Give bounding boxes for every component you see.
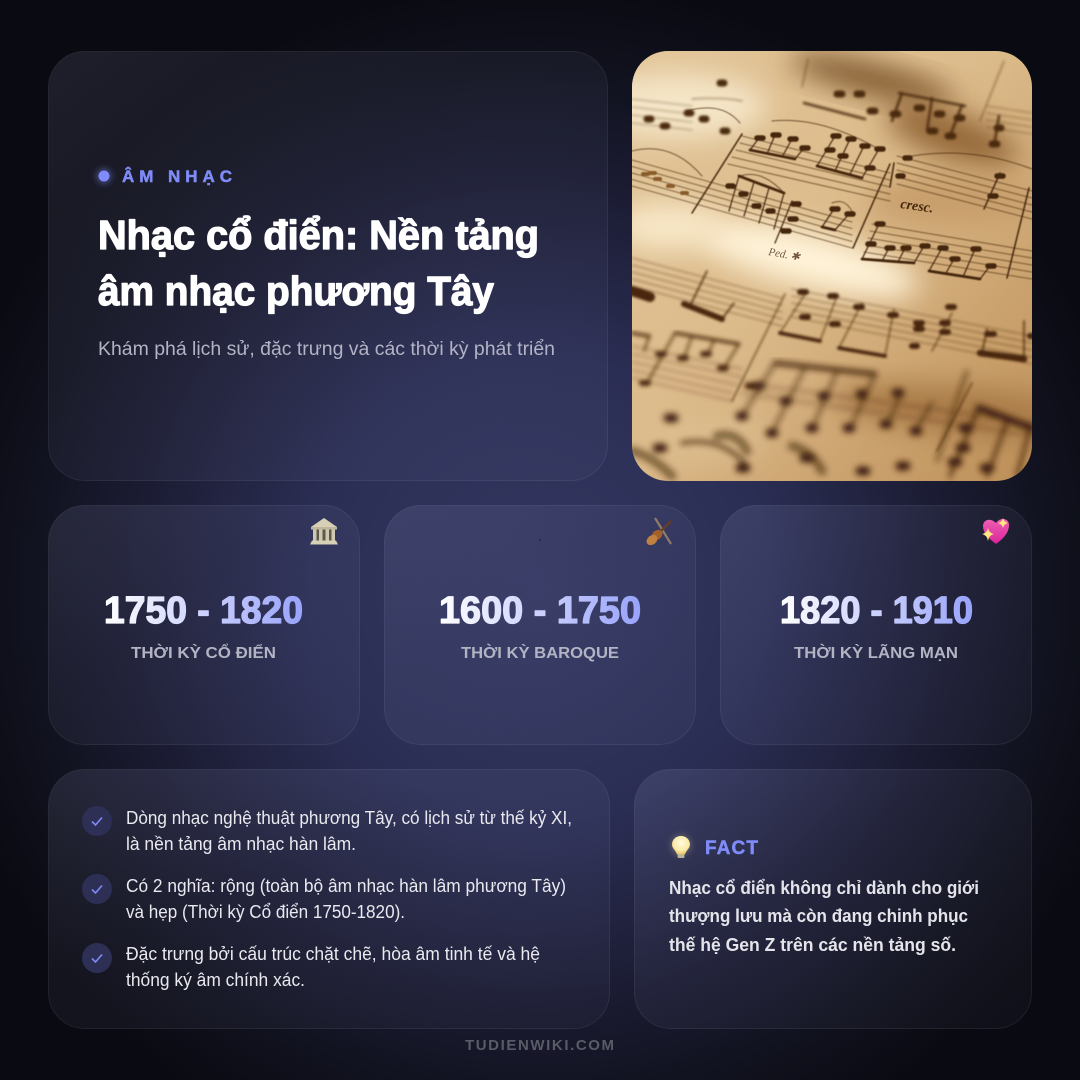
point 1: là nền tảng âm nhạc hàn lâm. [126, 834, 356, 854]
image: sheet music photo [632, 51, 1032, 481]
subtitle: Khám phá lịch sử, đặc trưng và các thời kỳ phát triển [98, 339, 555, 360]
icon: classical building [310, 518, 338, 544]
panel: key points [48, 770, 610, 1028]
fact text: thượng lưu mà còn đang chinh phục [669, 906, 968, 926]
point 2 [82, 874, 566, 922]
sheet: blurred top staves [632, 59, 1032, 146]
sheet: printed marks: cresc. [899, 197, 934, 217]
eyebrow: Âm nhạc: ÂM NHẠC [122, 167, 232, 186]
title: âm nhạc phương Tây [98, 268, 494, 314]
stat value: 1600 - 1750 [439, 590, 641, 632]
fact text: thế hệ Gen Z trên các nền tảng số. [669, 935, 956, 955]
icon: light bulb [671, 835, 691, 858]
stat value: 1820 - 1910 [780, 590, 973, 632]
title [98, 212, 539, 314]
point 3: Đặc trưng bởi cấu trúc chặt chẽ, hòa âm tinh tế và hệ [126, 944, 540, 964]
footer: site name: TUDIENWIKI.COM [465, 1037, 614, 1054]
fact label: FACT [705, 838, 758, 859]
panel: stat baroque [384, 506, 696, 744]
sheet: lower staves [632, 258, 1032, 451]
point 3 [82, 943, 540, 990]
stat value: 1750 - 1820 [104, 590, 303, 632]
stat label: THỜI KỲ BAROQUE [461, 643, 619, 662]
fact text: Nhạc cổ điển không chỉ dành cho giới [669, 878, 979, 898]
icon: sparkling heart [982, 518, 1009, 544]
sheet: printed marks: Ped. ✱ [766, 246, 802, 264]
icon: violin [645, 518, 671, 547]
stat label: THỜI KỲ CỔ ĐIỂN [131, 643, 276, 662]
sheet: printed marks [768, 202, 932, 260]
point 3: thống ký âm chính xác. [126, 970, 305, 990]
point 1: Dòng nhạc nghệ thuật phương Tây, có lịch sử từ thế kỷ XI, [126, 808, 572, 828]
point 2: và hẹp (Thời kỳ Cổ điển 1750-1820). [126, 902, 405, 922]
sheet: lower-left staves [632, 333, 754, 401]
panel: hero [48, 52, 608, 480]
sheet: blurred foreground staves [632, 363, 1032, 476]
panel: stat classical [48, 506, 360, 744]
panel: stat romantic [720, 506, 1032, 744]
sheet: sharp middle staves [632, 108, 1032, 279]
panel: fact [634, 770, 1032, 1028]
point 1 [82, 806, 572, 854]
fact text [669, 878, 979, 955]
stat label: THỜI KỲ LÃNG MẠN [794, 642, 958, 662]
title: Nhạc cổ điển: Nền tảng [98, 212, 539, 258]
point 2: Có 2 nghĩa: rộng (toàn bộ âm nhạc hàn lâm phương Tây) [126, 876, 566, 896]
